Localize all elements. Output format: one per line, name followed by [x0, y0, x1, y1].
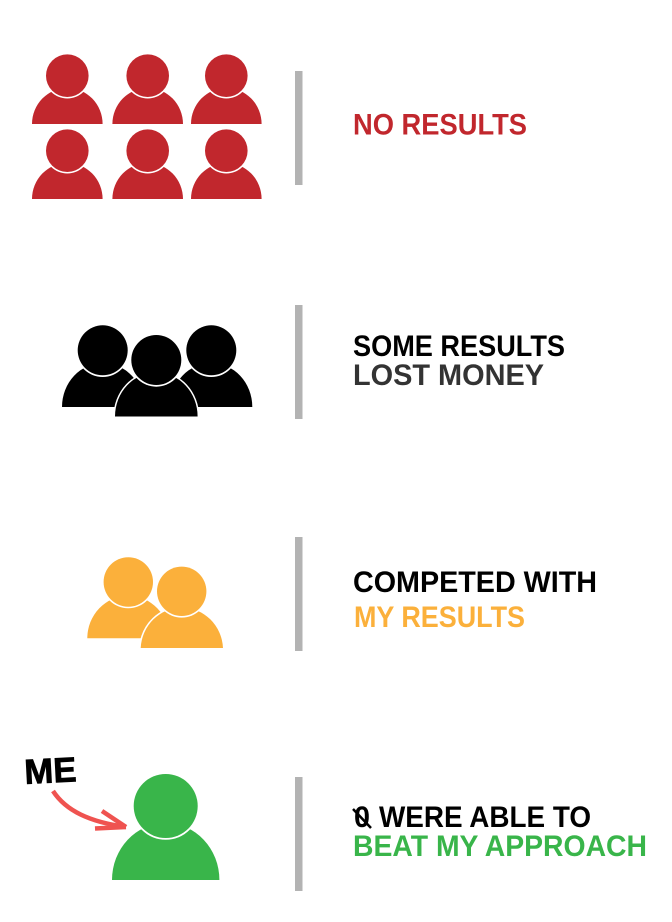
icon: six red people: [32, 53, 262, 199]
icon: struck zero: 0: [354, 801, 370, 834]
text: no results: NO RESULTS: [353, 108, 527, 142]
label: me: ME: [23, 750, 77, 792]
icon: two orange people: [87, 556, 223, 648]
divider bar: [295, 777, 302, 891]
panel: competed: [87, 537, 597, 651]
text: beat my approach: BEAT MY APPROACH: [353, 830, 647, 863]
icon: three black people: [62, 324, 252, 416]
divider bar: [295, 71, 302, 185]
panel: no results: [32, 53, 527, 199]
divider bar: [295, 305, 302, 419]
icon: green person: [112, 772, 219, 880]
text: some results: SOME RESULTS: [353, 330, 565, 363]
divider bar: [295, 537, 302, 651]
arrow: [53, 791, 126, 828]
text: competed with: COMPETED WITH: [353, 566, 597, 599]
text: my results: MY RESULTS: [354, 601, 525, 634]
panel: me: [23, 750, 647, 891]
text: lost money: LOST MONEY: [353, 359, 544, 392]
text: were able to: WERE ABLE TO: [379, 801, 591, 834]
panel: some results: [62, 305, 565, 419]
